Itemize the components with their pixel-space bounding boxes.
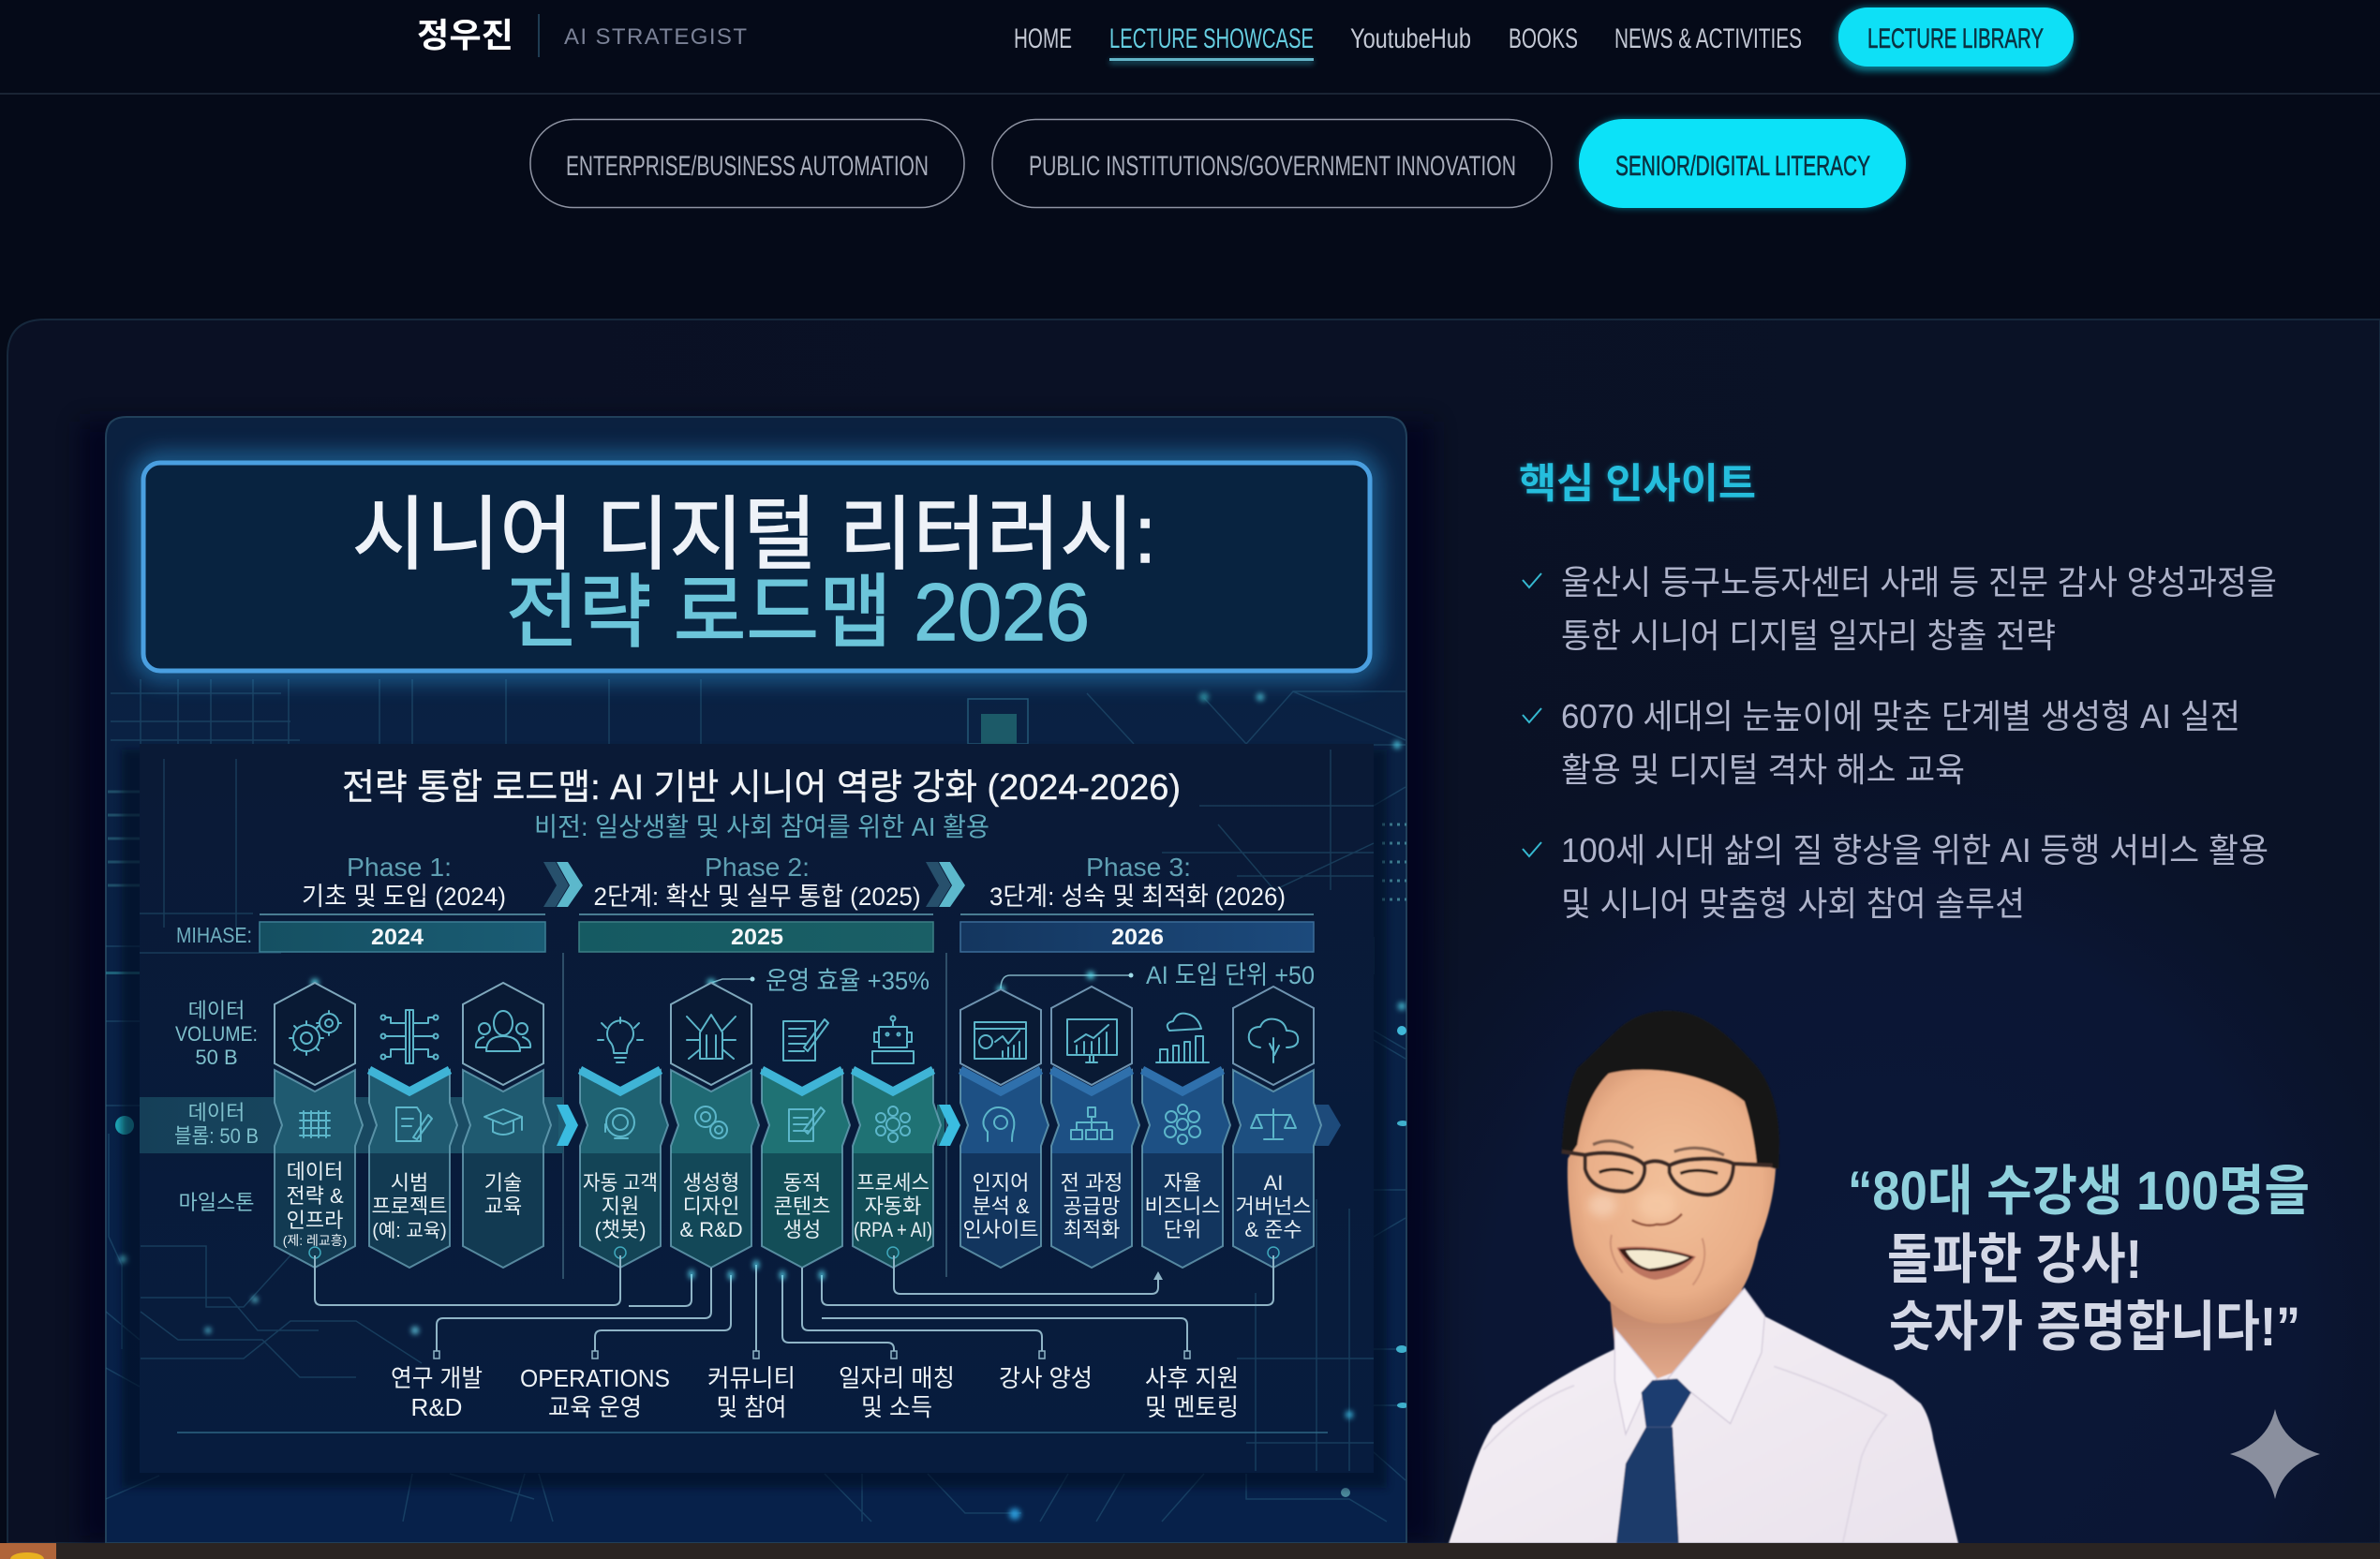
bar: 2025	[579, 922, 933, 952]
label: R&D	[391, 1364, 483, 1421]
category tabs	[530, 119, 1906, 208]
label: follow-up support	[1145, 1364, 1239, 1421]
icon: head spiral	[983, 1107, 1014, 1141]
icon: cloud	[1249, 1019, 1298, 1062]
nav button: lecture library	[1837, 7, 2074, 71]
column: auto customer support	[580, 1017, 668, 1268]
icon: sparkle	[2230, 1409, 2320, 1499]
phase 2 heading: 2단계: 확산 및 실무 통합 (2025)	[594, 883, 920, 911]
title line 1: 시니어 디지털 리터러시:	[352, 490, 1156, 580]
column: technology education: 교육	[484, 1195, 522, 1218]
testimonial quote: 숫자가 증명합니다!”	[1889, 1297, 2300, 1358]
phase 3 heading: Phase 3:	[1086, 853, 1191, 882]
icon: people	[476, 1011, 530, 1051]
chevron highlight	[369, 1070, 450, 1091]
chevron highlight	[960, 1070, 1041, 1091]
cheek highlight	[1588, 1194, 1616, 1217]
mouth	[1617, 1247, 1696, 1280]
insight item 2	[1523, 697, 2240, 789]
icon: graduation cap	[484, 1109, 522, 1135]
nav item: books: BOOKS	[1509, 23, 1578, 54]
chevron highlight	[580, 1070, 661, 1091]
column: AI governance	[1233, 987, 1321, 1268]
testimonial quote	[1848, 1161, 2310, 1358]
label: data bloom: 블롬: 50 B	[174, 1124, 259, 1148]
label: operations	[520, 1364, 670, 1421]
label: data volume: 50 B	[195, 1046, 238, 1069]
column: AI governance: AI	[1264, 1171, 1283, 1195]
label: instructor training: 강사 양성	[999, 1364, 1093, 1392]
band chevron: phase 1 to 2	[557, 1105, 578, 1146]
phase 2 heading: Phase 2:	[705, 853, 810, 882]
column: data strategy: 데이터	[287, 1160, 343, 1183]
shirt folds	[1483, 1366, 1886, 1543]
necktie	[1616, 1378, 1691, 1543]
label: job matching: 및 소득	[861, 1393, 932, 1421]
insight item 2: 6070 세대의 눈높이에 맞춘 단계별 생성형 AI 실전	[1561, 697, 2240, 735]
column: cognitive analysis: 인사이트	[963, 1218, 1038, 1241]
testimonial quote: “80대 수강생 100명을	[1848, 1161, 2310, 1222]
tab: public institutions	[992, 120, 1552, 208]
icon: brain circuit	[687, 1015, 736, 1059]
label: operations: 교육 운영	[548, 1393, 642, 1421]
collar	[1614, 1288, 1764, 1434]
column: autonomous business: 단위	[1164, 1218, 1201, 1241]
connector lines	[315, 1255, 1273, 1359]
insight item 1: 울산시 등구노등자센터 사래 등 진문 감사 양성과정을	[1561, 563, 2277, 601]
icon: check	[1523, 573, 1541, 587]
column: pilot project	[369, 1010, 457, 1268]
band chevron: phase 2 to 3	[939, 1105, 960, 1146]
icon: light bulb	[598, 1017, 643, 1062]
label: data volume	[175, 999, 258, 1069]
insight item 1: 통한 시니어 디지털 일자리 창출 전략	[1561, 616, 2056, 655]
icon: contract	[783, 1019, 828, 1061]
column: dynamic content: 콘텐츠	[774, 1195, 830, 1218]
label: data bloom: 데이터	[188, 1101, 245, 1124]
icon: city cloud	[1156, 1014, 1209, 1062]
eyebrows	[1593, 1141, 1724, 1155]
chevron highlight	[1051, 1070, 1132, 1091]
column: pilot project: 프로젝트	[372, 1195, 447, 1218]
roadmap vision: 비전: 일상생활 및 사회 참여를 위한 AI 활용	[534, 812, 989, 841]
label: community: 커뮤니티	[707, 1364, 796, 1392]
icon: data matrix	[300, 1111, 330, 1137]
roadmap heading: 전략 통합 로드맵: AI 기반 시니어 역량 강화 (2024-2026)	[342, 768, 1181, 808]
nav item: youtube hub: YoutubeHub	[1350, 23, 1471, 54]
logo name: 정우진	[417, 16, 513, 54]
icon: design spirals	[695, 1106, 727, 1138]
column: auto customer support: 자동 고객	[583, 1171, 658, 1195]
bar: 2024: 2024	[371, 925, 424, 950]
label: community: 및 참여	[716, 1393, 787, 1421]
neck	[1610, 1288, 1745, 1378]
bottom labels	[391, 1364, 1239, 1421]
column: generative design: & R&D	[679, 1218, 743, 1241]
arrow: phase 1 to 2	[543, 862, 583, 907]
bar: 2026: 2026	[1111, 925, 1164, 950]
chevron highlight	[1142, 1070, 1223, 1091]
chevron highlight	[853, 1070, 933, 1091]
column: auto customer support: (챗봇)	[594, 1218, 647, 1241]
column: process automation	[853, 1016, 941, 1268]
hair	[1562, 1011, 1779, 1169]
label: job matching: 일자리 매칭	[839, 1364, 955, 1392]
column: data strategy: 전략 &	[286, 1184, 344, 1208]
column: process automation: 자동화	[865, 1195, 921, 1218]
column: autonomous business: 비즈니스	[1145, 1195, 1220, 1218]
phase 1 heading: Phase 1:	[347, 853, 452, 882]
row label: phase: MIHASE:	[176, 923, 252, 947]
column: cognitive analysis: 분석 &	[972, 1195, 1030, 1218]
shirt	[1449, 1288, 1958, 1543]
tab: senior digital literacy active: SENIOR/DIGITAL LITERACY	[1615, 151, 1870, 182]
column: generative design: 생성형	[683, 1171, 739, 1195]
column: cognitive analysis: 인지어	[973, 1171, 1029, 1195]
column: technology education	[463, 983, 551, 1268]
icon: monitor chart	[1067, 1019, 1117, 1062]
label: operations: OPERATIONS	[520, 1364, 670, 1392]
icon: org flow	[1071, 1107, 1112, 1139]
panel: showcase container	[7, 319, 2380, 1543]
column: data strategy: 인프라	[287, 1209, 343, 1232]
column: pilot project: (예: 교육)	[372, 1220, 447, 1241]
icon: gears	[290, 1011, 341, 1055]
nav item: lecture showcase	[1109, 23, 1314, 65]
column: data strategy: (제: 레교흥)	[283, 1233, 347, 1248]
panel: roadmap	[122, 744, 1387, 1488]
tab: senior digital literacy active	[1579, 119, 1906, 208]
column: supply chain: 전 과정	[1061, 1171, 1123, 1195]
column: pilot project: 시범	[391, 1171, 428, 1195]
column: supply chain: 최적화	[1064, 1218, 1120, 1241]
column: dynamic content: 생성	[783, 1218, 821, 1241]
arrow: phase 2 to 3	[926, 862, 965, 907]
circuit background	[106, 679, 1408, 1522]
icon: check	[1523, 708, 1541, 722]
annotation: efficiency: 운영 효율 +35%	[766, 967, 930, 995]
tab: enterprise	[530, 120, 964, 208]
column: dynamic content	[762, 1019, 850, 1268]
annotation: adoption: AI 도입 단위 +50	[1146, 961, 1315, 989]
bar: 2026	[960, 922, 1314, 952]
bottom browser strip	[0, 1543, 2380, 1559]
column: AI governance: 거버넌스	[1236, 1195, 1311, 1218]
header navigation	[0, 7, 2380, 95]
nav item: home: HOME	[1014, 23, 1072, 54]
title line 2: 전략 로드맵 2026	[506, 568, 1090, 658]
bar: 2025: 2025	[731, 925, 783, 950]
insights heading: 핵심 인사이트	[1519, 461, 1756, 507]
chevron highlight	[762, 1070, 842, 1091]
card drop shadow	[80, 422, 1434, 1543]
icon: support agent	[605, 1108, 634, 1138]
phase 3 heading	[989, 853, 1286, 911]
icon: robot	[872, 1016, 914, 1063]
insights block	[1519, 461, 2277, 923]
icon: check	[1523, 842, 1541, 856]
column: generative design	[671, 983, 759, 1268]
inner circuit decor	[140, 750, 1374, 1471]
annotation: adoption	[997, 961, 1315, 993]
tab: public institutions: PUBLIC INSTITUTIONS/GOVERNMENT INNOVATION	[1029, 151, 1516, 182]
phase 3 heading: 3단계: 성숙 및 최적화 (2026)	[989, 883, 1286, 911]
row labels	[140, 999, 1341, 1214]
column: process automation: 프로세스	[856, 1171, 930, 1195]
panel: infographic card	[106, 417, 1408, 1543]
icon: dashboard	[974, 1022, 1026, 1059]
label: R&D: 연구 개발	[391, 1364, 483, 1392]
column: generative design: 디자인	[683, 1195, 739, 1218]
label: job matching	[839, 1364, 955, 1421]
nav button: lecture library: LECTURE LIBRARY	[1867, 23, 2044, 54]
icon: circuit chip	[380, 1010, 439, 1063]
icon: document pen	[396, 1107, 432, 1141]
column: technology education: 기술	[484, 1171, 522, 1195]
icon: scales	[1251, 1109, 1296, 1139]
logo tagline: AI STRATEGIST	[564, 24, 747, 50]
icon: neural cluster	[1165, 1105, 1200, 1144]
column: autonomous business: 자율	[1164, 1171, 1201, 1195]
band: data bloom background	[140, 1097, 1341, 1153]
column: cognitive analysis	[960, 989, 1049, 1268]
testimonial quote: 돌파한 강사!	[1887, 1229, 2142, 1290]
icon: document edit	[789, 1107, 825, 1141]
nav item: news and activities: NEWS & ACTIVITIES	[1614, 23, 1802, 54]
insight item 3: 및 시니어 맞춤형 사회 참여 솔루션	[1561, 884, 2025, 923]
nose	[1632, 1191, 1682, 1225]
phase 2 heading	[594, 853, 920, 911]
glasses	[1562, 1151, 1773, 1195]
label: milestone: 마일스톤	[179, 1191, 254, 1214]
label: follow-up support: 사후 지원	[1145, 1364, 1239, 1392]
label: community	[707, 1364, 796, 1421]
phase 1 heading: 기초 및 도입 (2024)	[302, 883, 506, 911]
face	[1568, 1070, 1776, 1324]
smile creases	[1611, 1235, 1704, 1285]
phase 1 heading	[302, 853, 506, 911]
insight item 2: 활용 및 디지털 격차 해소 교육	[1561, 750, 1965, 789]
label: data volume: VOLUME:	[175, 1022, 258, 1046]
insight item 1	[1523, 563, 2277, 655]
label: follow-up support: 및 멘토링	[1145, 1393, 1239, 1421]
bar: 2024	[260, 922, 545, 952]
column: auto customer support: 지원	[602, 1195, 639, 1218]
column: autonomous business	[1142, 1014, 1230, 1268]
year bars	[176, 913, 1314, 952]
label: data bloom	[174, 1101, 259, 1148]
column: supply chain: 공급망	[1064, 1195, 1120, 1218]
icon: network flower	[876, 1106, 910, 1142]
portrait backdrop glow	[1218, 656, 2380, 1543]
insight item 3: 100세 시대 삶의 질 향상을 위한 AI 등행 서비스 활용	[1561, 831, 2268, 869]
insight item 3	[1523, 831, 2268, 923]
icon: app badge	[0, 1543, 56, 1559]
title box	[143, 463, 1370, 671]
portrait of presenter	[1449, 1011, 1958, 1543]
column: data strategy	[275, 983, 363, 1268]
tab: enterprise: ENTERPRISE/BUSINESS AUTOMATION	[566, 151, 929, 182]
label: data volume: 데이터	[188, 999, 245, 1022]
column: supply chain	[1051, 987, 1139, 1268]
eyes	[1599, 1169, 1718, 1173]
label: R&D: R&D	[411, 1393, 462, 1421]
column: process automation: (RPA + AI)	[854, 1218, 932, 1241]
insights heading: 핵심 인사이트	[1519, 461, 1756, 507]
column: AI governance: & 준수	[1244, 1218, 1302, 1241]
nav item: lecture showcase: LECTURE SHOWCASE	[1109, 23, 1314, 54]
column: dynamic content: 동적	[783, 1171, 821, 1195]
